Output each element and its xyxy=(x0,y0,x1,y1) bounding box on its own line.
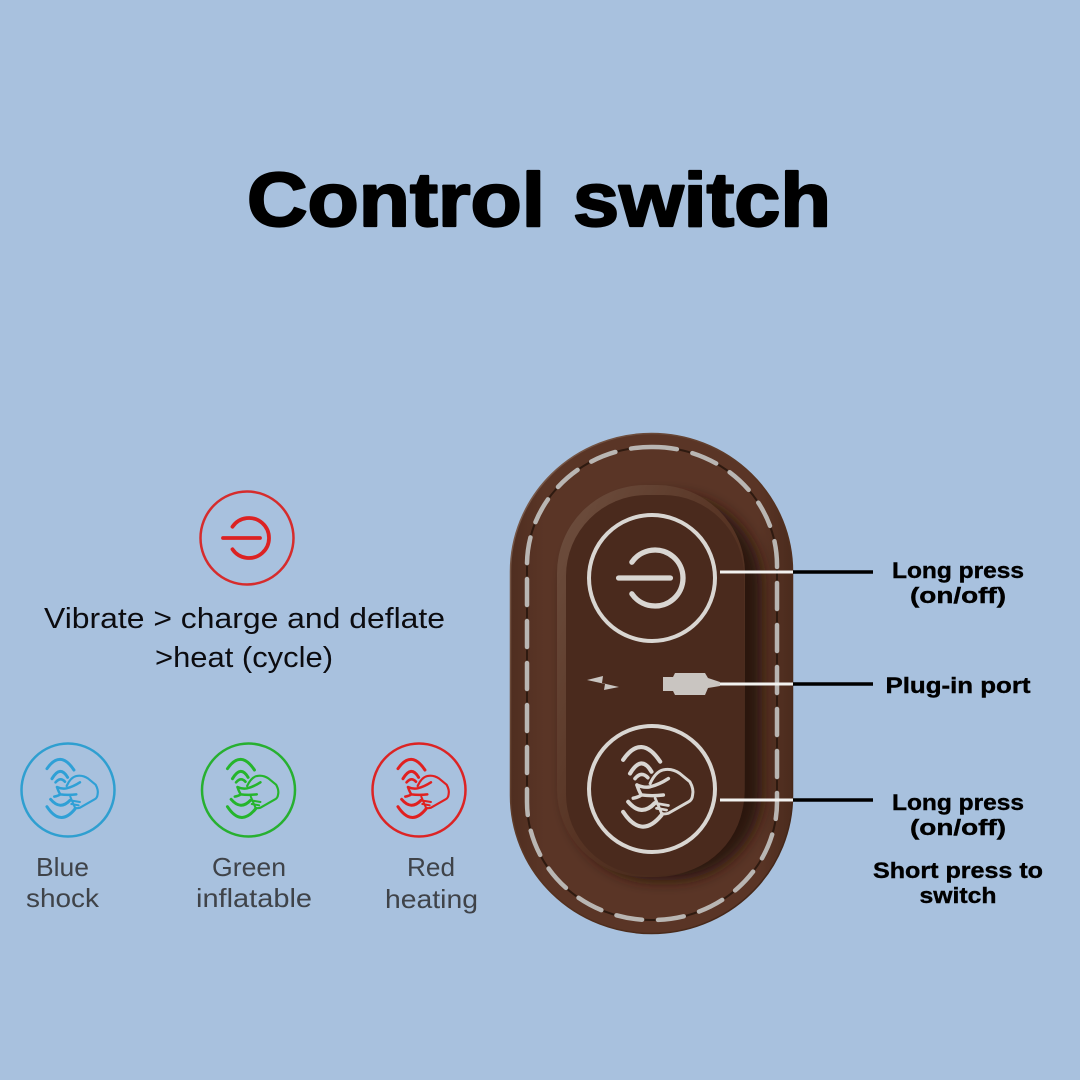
text block: cycle description: Vibrate > charge and deflate xyxy=(44,603,445,635)
label: red heating xyxy=(385,852,478,914)
title: switch xyxy=(573,158,831,243)
title: Control xyxy=(247,158,545,243)
callout: long press and short press: (on/off) xyxy=(910,815,1006,840)
title xyxy=(247,158,831,243)
label: blue shock xyxy=(26,852,100,913)
button: mode xyxy=(589,726,715,852)
icon: red power mode indicator xyxy=(200,492,294,584)
label: red heating: Red xyxy=(407,852,455,882)
icon: USB plug xyxy=(663,673,720,695)
callout: long press and short press: switch xyxy=(920,883,996,908)
callout: long press on/off: (on/off) xyxy=(910,583,1006,608)
callout: plug-in port: Plug-in port xyxy=(886,673,1031,698)
label: blue shock: shock xyxy=(26,883,100,913)
button: power xyxy=(589,515,715,641)
icon: blue shock mode xyxy=(22,744,114,836)
label: red heating: heating xyxy=(385,884,478,914)
callout: long press and short press: Short press to xyxy=(873,858,1043,883)
label: blue shock: Blue xyxy=(36,852,89,882)
callout: long press on/off xyxy=(720,558,1024,608)
callout: long press on/off: Long press xyxy=(892,558,1024,583)
text block: cycle description xyxy=(44,603,445,674)
label: green inflatable: Green xyxy=(212,852,286,882)
label: green inflatable xyxy=(196,852,312,913)
callout: long press and short press xyxy=(720,790,1043,908)
icon: lightning bolt xyxy=(587,676,619,690)
device: leather control switch xyxy=(510,434,792,934)
icon: red heating mode xyxy=(372,744,466,836)
text block: cycle description: >heat (cycle) xyxy=(155,642,333,674)
icon: green inflatable mode xyxy=(202,744,295,836)
callout: long press and short press: Long press xyxy=(892,790,1024,815)
label: green inflatable: inflatable xyxy=(196,883,312,913)
